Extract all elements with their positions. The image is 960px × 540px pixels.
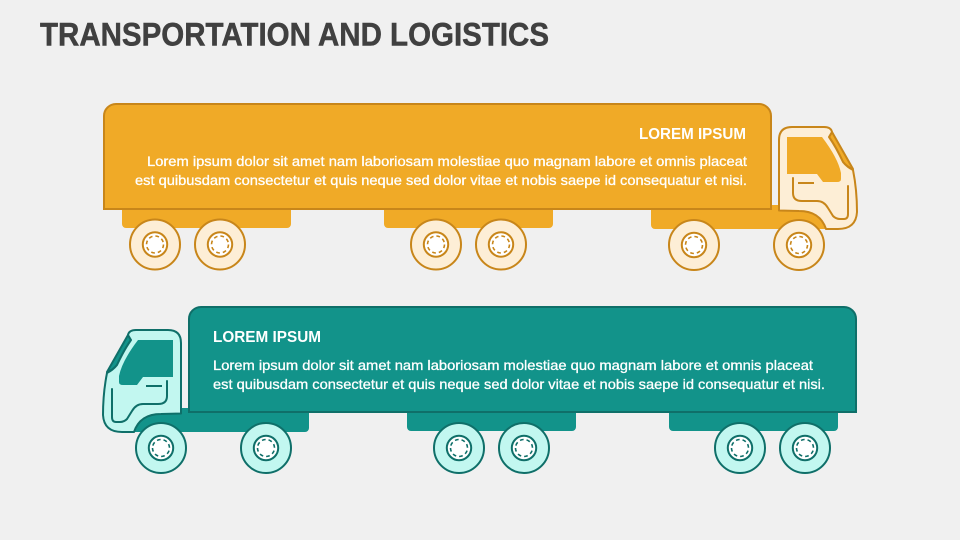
orange wheels	[130, 220, 824, 270]
teal body text: Lorem ipsum dolor sit amet nam laboriosam molestiae quo magnam labore et omnis placeat	[213, 357, 813, 373]
teal body text: est quibusdam consectetur et quis neque sed dolor vitae et nobis saepe id consequatur et nisi.	[213, 376, 825, 392]
orange chassis	[122, 203, 828, 229]
orange body text: Lorem ipsum dolor sit amet nam laboriosam molestiae quo magnam labore et omnis placeat	[147, 153, 747, 169]
teal cargo box	[189, 307, 856, 412]
orange heading: LOREM IPSUM	[639, 126, 746, 143]
teal heading: LOREM IPSUM	[213, 329, 321, 346]
orange cargo box	[104, 104, 771, 209]
orange body text: est quibusdam consectetur et quis neque sed dolor vitae et nobis saepe id consequatur et nisi.	[135, 172, 747, 188]
orange body text	[135, 153, 747, 188]
title: TRANSPORTATION AND LOGISTICS	[40, 16, 549, 52]
orange cab	[779, 127, 857, 229]
teal body text	[213, 357, 825, 392]
teal cab	[103, 330, 181, 432]
truck: orange	[104, 104, 857, 270]
teal chassis	[132, 406, 838, 432]
truck: teal	[103, 307, 856, 473]
teal wheels	[136, 423, 830, 473]
